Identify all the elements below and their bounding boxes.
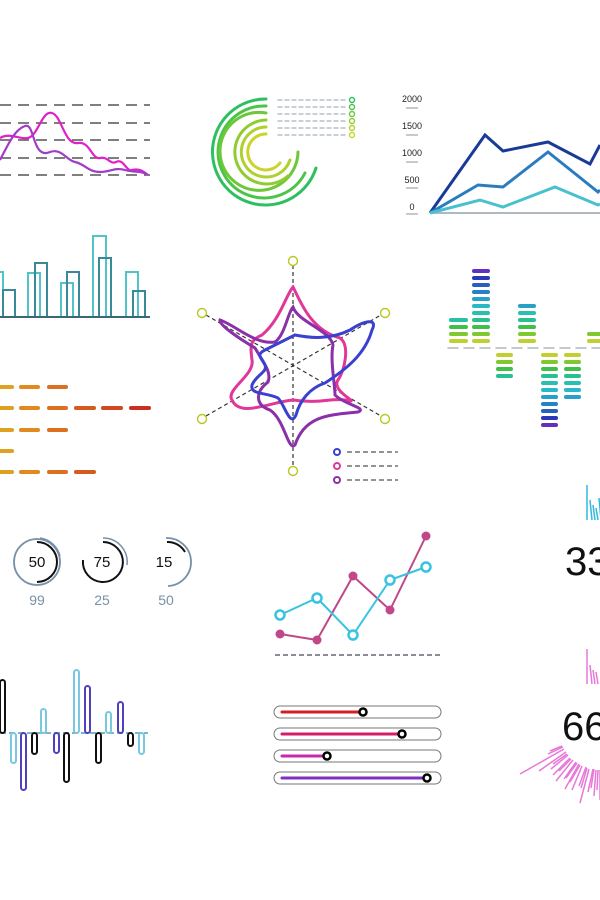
area line chart with axis: 2000 bbox=[402, 94, 422, 104]
circular gauges: 99 bbox=[29, 592, 45, 608]
equalizer bar chart bbox=[448, 271, 600, 425]
area line chart with axis: 1000 bbox=[402, 148, 422, 158]
area line chart with axis: 0 bbox=[409, 202, 415, 212]
circular gauges: 75 bbox=[94, 554, 110, 571]
area line chart with axis bbox=[402, 94, 600, 214]
radial gauge 33 bbox=[565, 485, 600, 584]
wave line chart bbox=[0, 105, 150, 175]
dotted line chart bbox=[275, 532, 440, 655]
circular gauges bbox=[14, 538, 191, 608]
orange dash rows bbox=[0, 387, 149, 472]
outlined bar chart bbox=[0, 236, 150, 317]
area line chart with axis: 500 bbox=[404, 175, 420, 185]
circular gauges: 15 bbox=[156, 554, 172, 571]
circular gauges: 50 bbox=[29, 554, 45, 571]
circular gauges: 25 bbox=[94, 592, 110, 608]
concentric arcs chart bbox=[212, 98, 354, 205]
radar chart bbox=[198, 256, 398, 483]
circular gauges: 50 bbox=[158, 592, 174, 608]
area line chart with axis: 1500 bbox=[402, 121, 422, 131]
radial gauge 66 bbox=[520, 649, 600, 803]
slider bars bbox=[274, 706, 441, 784]
up/down bar chart bbox=[0, 670, 148, 790]
